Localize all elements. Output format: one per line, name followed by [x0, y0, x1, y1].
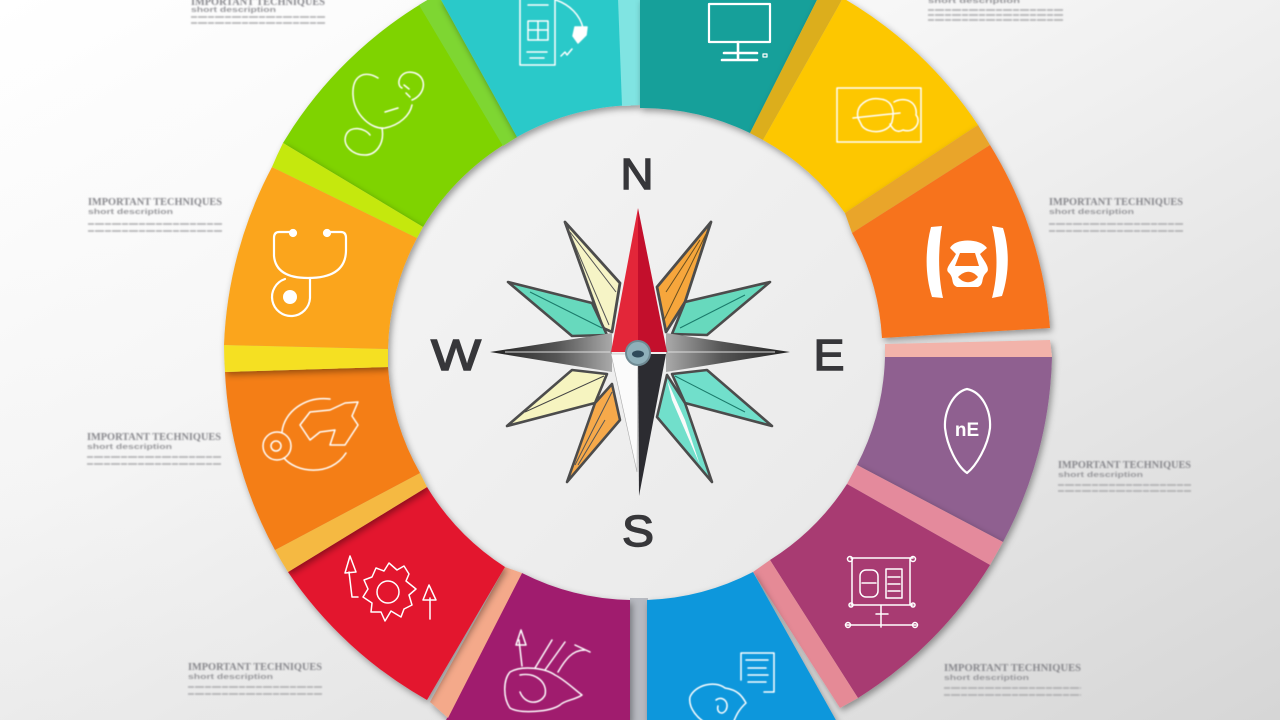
caption: bottom right: short description — [944, 673, 1030, 682]
compass rose — [490, 208, 790, 496]
arm: east — [666, 333, 790, 372]
segment: red — [288, 487, 505, 700]
segment: magenta — [753, 465, 1003, 708]
icon: gear with arrows (red) — [345, 556, 436, 621]
icon: desktop monitor (dark teal) — [709, 4, 770, 60]
icon: leaf badge (purple) — [945, 389, 990, 473]
icon: chart board (magenta) — [846, 556, 918, 628]
icon: phone with heart (cyan) — [520, 0, 587, 65]
caption: right lower: IMPORTANT TECHNIQUES — [1058, 460, 1191, 471]
segment: cyan — [440, 0, 640, 137]
icon: leaf badge (purple): nE — [955, 420, 979, 441]
segment: green — [283, 0, 517, 227]
caption: bottom left — [188, 662, 322, 694]
letter W: W — [431, 331, 482, 380]
cardinal letters — [431, 150, 844, 556]
icon: heart stethoscope (green) — [345, 72, 423, 155]
caption: left lower — [87, 432, 221, 464]
centre disc — [386, 102, 890, 606]
caption: right lower — [1058, 460, 1191, 491]
icon: organ with arrow (plum) — [505, 630, 590, 712]
spike: north-north-west — [565, 222, 620, 332]
spike: east-south-east — [672, 370, 772, 426]
caption: left lower: IMPORTANT TECHNIQUES — [87, 432, 221, 443]
segment: yellow — [750, 0, 978, 213]
caption: top right — [928, 0, 1063, 20]
spike: west-north-west — [508, 282, 607, 336]
segment: dark teal — [640, 0, 818, 133]
caption: bottom right: IMPORTANT TECHNIQUES — [944, 663, 1081, 674]
caption: top left — [191, 0, 325, 23]
caption: right upper — [1049, 197, 1183, 231]
segment: plum — [430, 567, 630, 720]
caption: left lower: short description — [87, 442, 173, 451]
caption: left upper — [88, 197, 222, 231]
caption: right upper: short description — [1049, 207, 1135, 216]
compass hub — [626, 341, 650, 365]
icon: brain card (yellow) — [837, 88, 921, 142]
needle: south (white and black) — [611, 354, 666, 496]
icon: document and cloud (blue) — [690, 653, 774, 720]
icon: head between brackets (orange) — [927, 226, 1008, 298]
icon: globe (orange left) — [263, 399, 358, 470]
spike: north-north-east — [657, 222, 711, 332]
spike: south-south-east — [657, 375, 712, 482]
segment: orange right — [845, 125, 1050, 338]
needle: north (red) — [611, 208, 667, 352]
letter N: N — [620, 150, 654, 199]
icon: stethoscope (amber) — [272, 230, 346, 316]
spike: east-north-east — [672, 282, 770, 335]
letter S: S — [622, 507, 654, 556]
segment: orange left — [225, 367, 427, 572]
spike: south-south-west — [567, 384, 620, 482]
caption: bottom left: IMPORTANT TECHNIQUES — [188, 662, 322, 673]
caption: right upper: IMPORTANT TECHNIQUES — [1049, 197, 1183, 208]
segment: amber — [224, 143, 423, 372]
letter E: E — [814, 331, 844, 380]
caption: left upper: short description — [88, 207, 174, 216]
arm: west — [490, 333, 612, 372]
segment: blue — [647, 572, 837, 720]
segment: purple — [857, 340, 1052, 542]
caption: top left: short description — [191, 5, 277, 14]
gap shading at bottom of wheel — [630, 598, 648, 720]
ring of coloured segments — [224, 0, 1052, 720]
spike: west-south-west — [507, 370, 607, 426]
caption: bottom left: short description — [188, 672, 274, 681]
caption: left upper: IMPORTANT TECHNIQUES — [88, 197, 222, 208]
caption: right lower: short description — [1058, 470, 1144, 479]
caption: bottom right — [944, 663, 1081, 695]
